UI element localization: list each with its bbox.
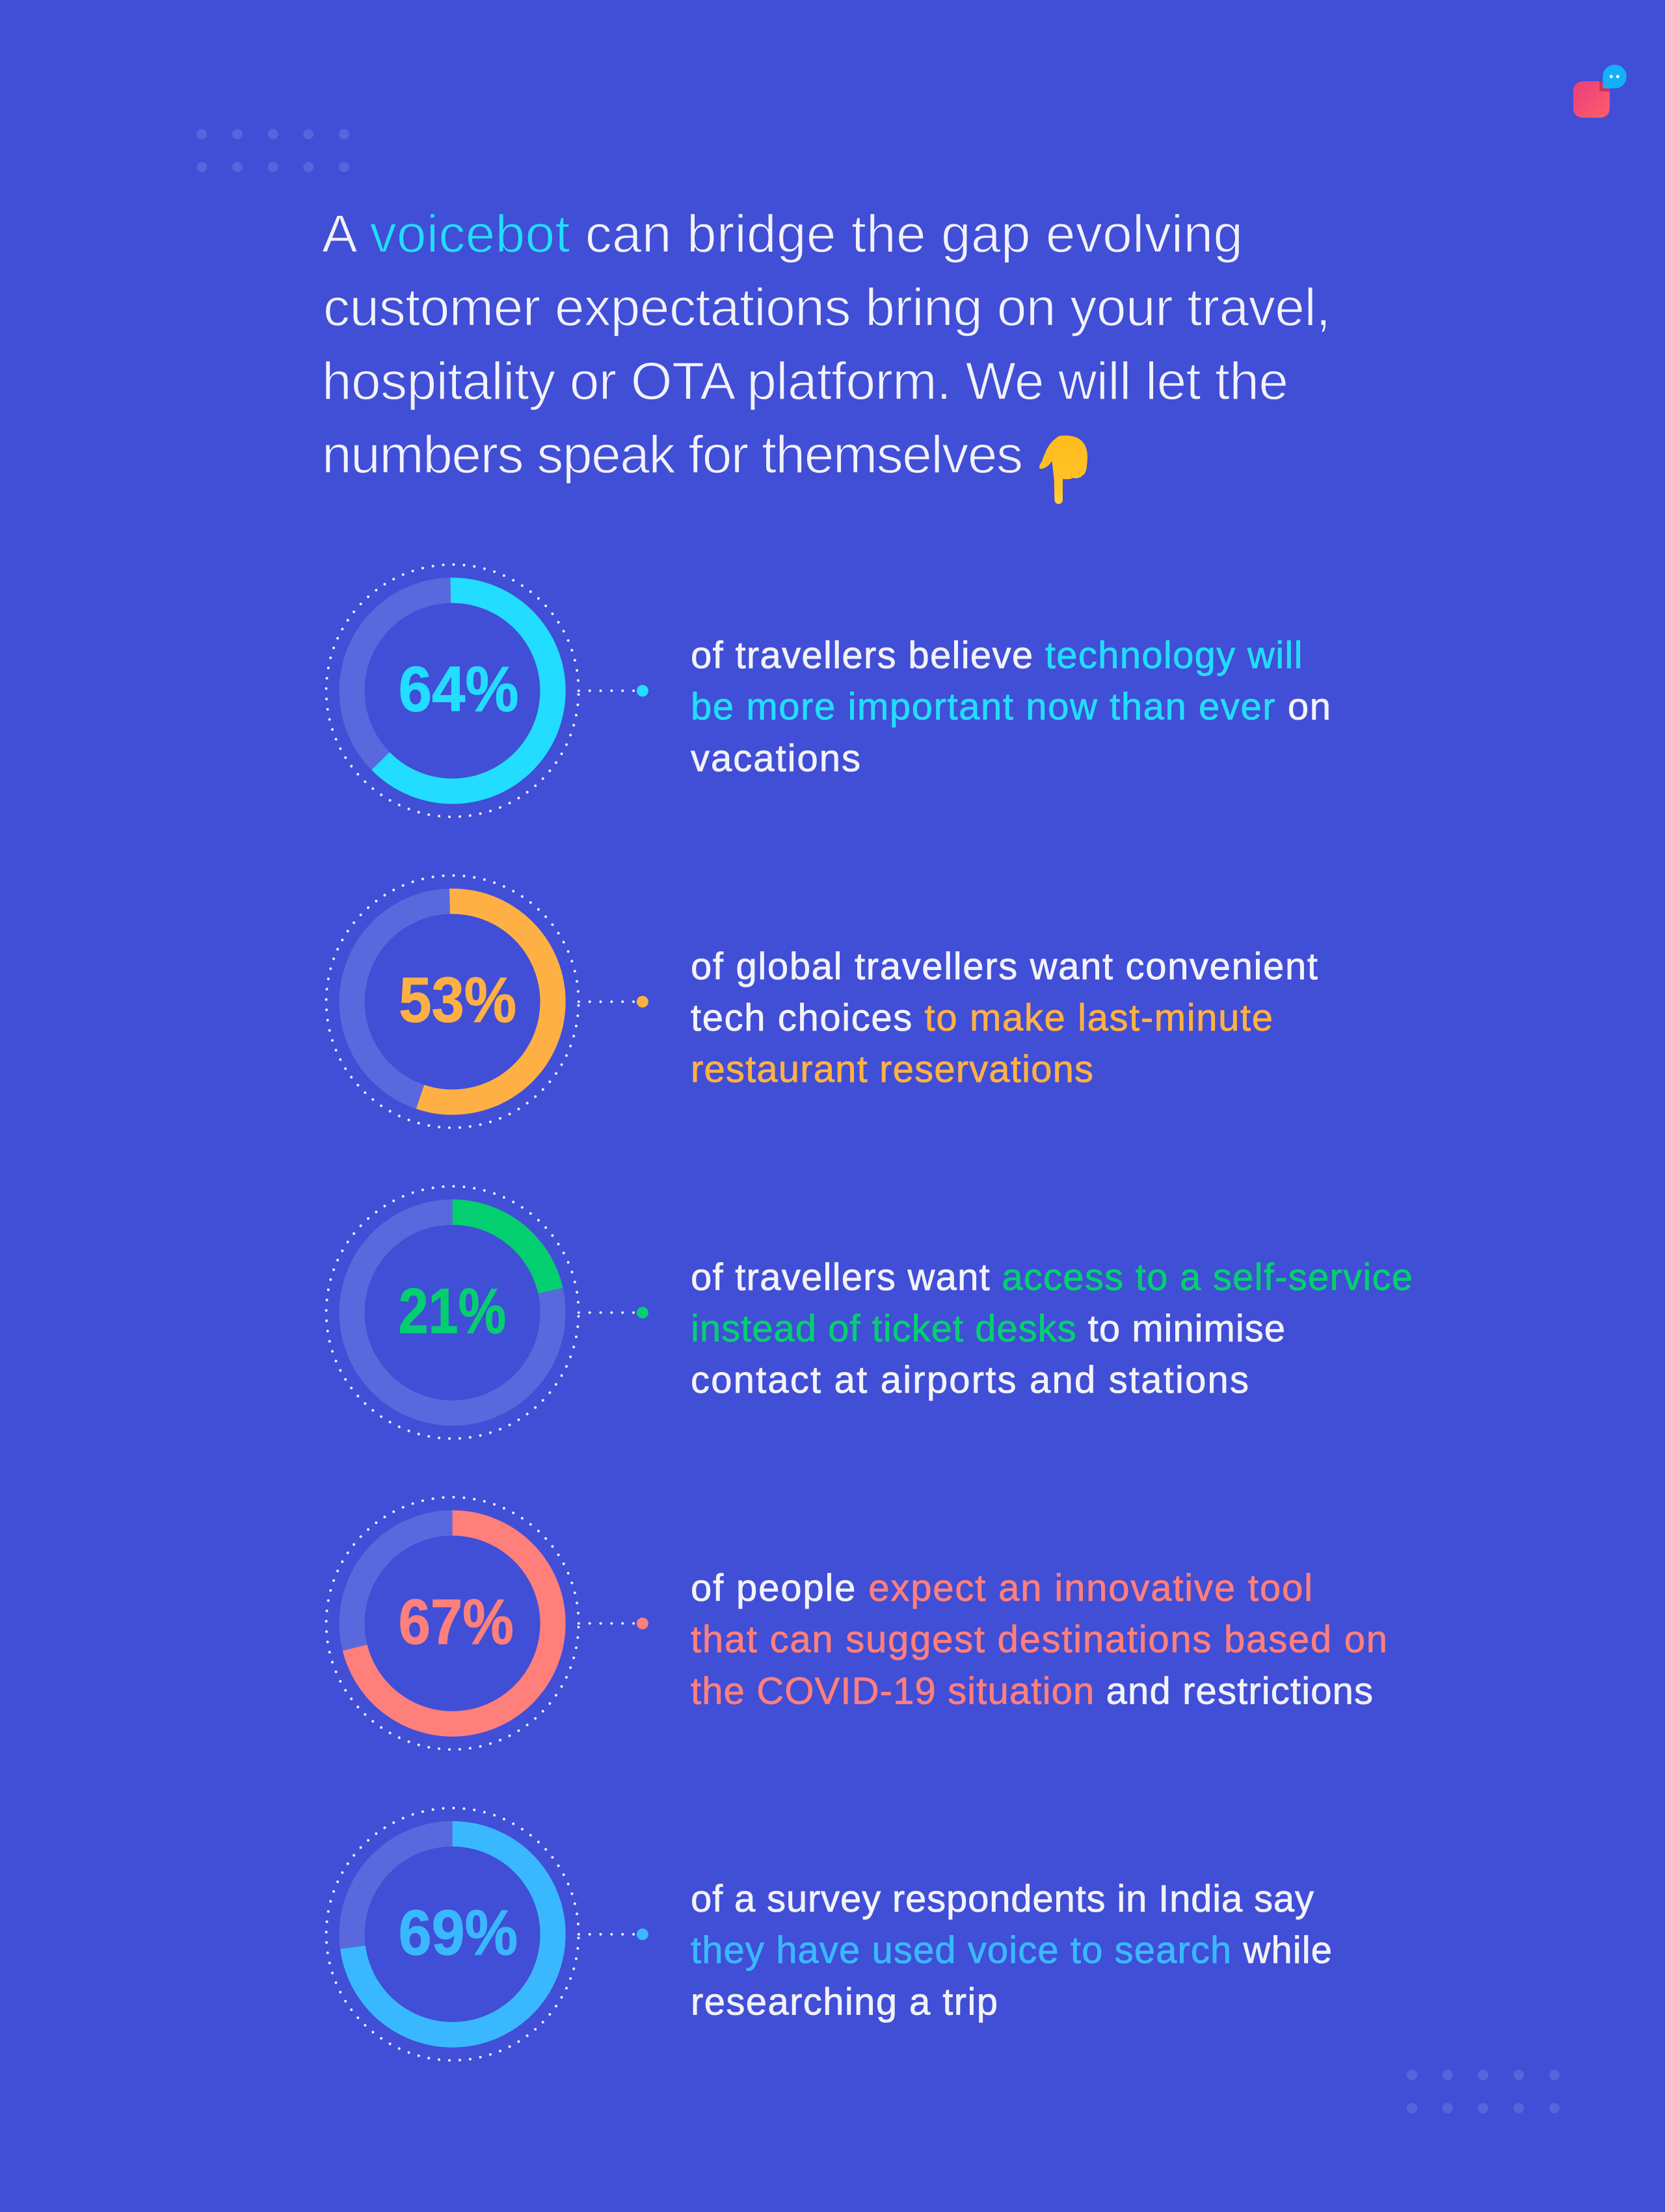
- text: 67% description: [691, 1567, 1387, 1712]
- percentage: 53%: 53%: [399, 964, 516, 1036]
- donut chart: 69%: [326, 1808, 579, 2061]
- text: 53% description: tech choices to make last-minute: [691, 997, 1273, 1039]
- text: 67% description: the COVID-19 situation and restrictions: [691, 1670, 1373, 1712]
- text: 64% description: be more important now than ever on: [691, 686, 1331, 728]
- connector: [579, 1618, 648, 1629]
- text: 21% description: [691, 1256, 1413, 1401]
- donut chart: 21%: [326, 1187, 579, 1439]
- icon: chat logo: [1573, 64, 1627, 118]
- panel: 67% statistic: [326, 1497, 1387, 1750]
- text: 69% description: [691, 1878, 1332, 2023]
- text: 64% description: of travellers believe technology will: [691, 635, 1302, 677]
- text: 67% description: of people expect an innovative tool: [691, 1567, 1312, 1609]
- text: 21% description: of travellers want access to a self-service: [691, 1256, 1413, 1298]
- percentage: 67%: 67%: [399, 1586, 514, 1657]
- panel: 21% statistic: [326, 1187, 1413, 1439]
- panel: 64% statistic: [326, 564, 1331, 817]
- text: 69% description: researching a trip: [691, 1981, 998, 2023]
- text: 64% description: [691, 635, 1331, 780]
- percentage: 21%: 21%: [399, 1275, 506, 1347]
- text: 64% description: vacations: [691, 737, 860, 780]
- connector: [579, 1307, 648, 1319]
- icon: pointing down hand: [1039, 436, 1087, 504]
- heading: [322, 204, 1331, 484]
- decorative dot grid: bottom right: [1407, 2070, 1560, 2113]
- panel: 53% statistic: [326, 875, 1318, 1127]
- connector: [579, 685, 648, 696]
- text: 69% description: of a survey respondents in India say: [691, 1878, 1314, 1920]
- text: 21% description: contact at airports and stations: [691, 1359, 1249, 1401]
- connector: [579, 996, 648, 1008]
- heading: customer expectations bring on your travel,: [323, 278, 1331, 337]
- panel: 69% statistic: [326, 1808, 1332, 2061]
- heading: numbers speak for themselves: [322, 425, 1023, 484]
- percentage: 69%: 69%: [399, 1897, 518, 1968]
- donut chart: 64%: [326, 564, 579, 817]
- donut chart: 53%: [326, 875, 579, 1127]
- text: 69% description: they have used voice to search while: [691, 1929, 1332, 1971]
- text: 53% description: of global travellers want convenient: [691, 945, 1318, 988]
- text: 21% description: instead of ticket desks to minimise: [691, 1308, 1285, 1350]
- decorative dot grid: top left: [196, 129, 349, 172]
- heading: A voicebot can bridge the gap evolving: [322, 204, 1243, 263]
- percentage: 64%: 64%: [399, 653, 519, 724]
- text: 53% description: [691, 945, 1318, 1090]
- text: 67% description: that can suggest destinations based on: [691, 1618, 1387, 1661]
- donut chart: 67%: [326, 1497, 579, 1750]
- text: 53% description: restaurant reservations: [691, 1048, 1093, 1090]
- heading: hospitality or OTA platform. We will let the: [322, 352, 1288, 411]
- connector: [579, 1929, 648, 1940]
